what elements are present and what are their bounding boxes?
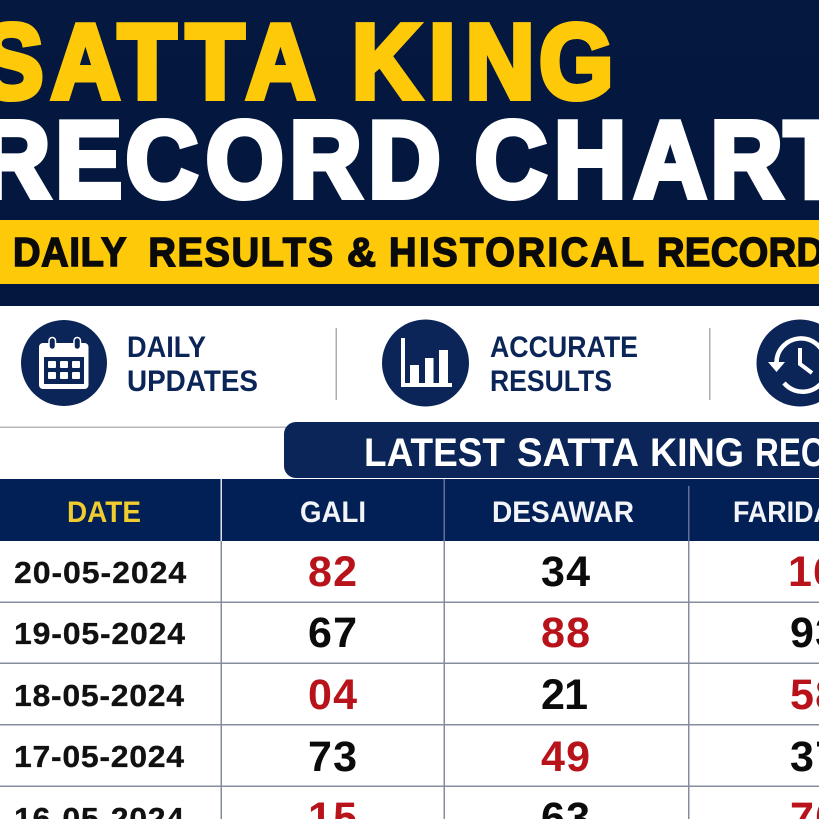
tab background <box>284 422 819 478</box>
section heading tab <box>284 422 819 478</box>
ribbon text: DAILY <box>13 230 126 275</box>
label: accurate results: RESULTS <box>490 365 612 398</box>
label: daily updates: DAILY <box>127 331 206 364</box>
tab text: LATEST <box>364 431 505 475</box>
label: accurate results: ACCURATE <box>490 331 638 364</box>
row: 17-05-2024: 17-05-2024 <box>14 740 185 774</box>
label: daily updates: UPDATES <box>127 365 258 398</box>
ribbon text: HISTORICAL <box>389 230 644 275</box>
header background <box>0 0 819 306</box>
ribbon text: RESULTS <box>148 230 333 275</box>
feature strip <box>21 320 819 406</box>
ribbon bar <box>0 220 819 284</box>
tab text: KING <box>650 431 744 475</box>
row: 19-05-2024 <box>14 609 819 657</box>
icon: clock history <box>756 320 819 406</box>
row: 20-05-2024: 34 <box>541 548 590 596</box>
ribbon text <box>13 230 819 275</box>
tab text: SATTA <box>517 431 639 475</box>
row: 18-05-2024: 04 <box>308 671 357 719</box>
tab text <box>364 431 819 475</box>
row: 19-05-2024: 19-05-2024 <box>14 617 186 651</box>
row: 17-05-2024: 73 <box>308 733 357 781</box>
row: 19-05-2024: 88 <box>541 609 590 657</box>
label: daily updates <box>127 331 258 398</box>
results table <box>0 479 819 819</box>
icon: calendar <box>21 320 107 406</box>
header banner <box>0 0 819 306</box>
label: accurate results <box>490 331 638 398</box>
row: 18-05-2024: 18-05-2024 <box>14 679 185 713</box>
row: 19-05-2024: 67 <box>308 609 357 657</box>
icon: bar chart <box>382 320 469 406</box>
table grid lines <box>0 541 819 819</box>
row: 18-05-2024: 21 <box>541 671 588 719</box>
row: 17-05-2024: 49 <box>541 733 590 781</box>
row: 18-05-2024 <box>14 671 819 719</box>
feature: history icon <box>756 320 819 406</box>
row: 20-05-2024: 82 <box>308 548 357 596</box>
row: 16-05-2024 <box>14 794 819 819</box>
row: 20-05-2024 <box>14 548 819 596</box>
feature: accurate results <box>382 320 638 406</box>
ribbon text: & <box>347 230 376 275</box>
table header row <box>0 479 819 541</box>
column: date: DATE <box>67 496 141 529</box>
feature: daily updates <box>21 320 258 406</box>
column: desawar: DESAWAR <box>492 496 634 529</box>
row: 20-05-2024: 20-05-2024 <box>14 556 187 590</box>
row: 17-05-2024 <box>14 733 819 781</box>
column: gali: GALI <box>300 496 366 529</box>
subtitle ribbon <box>0 220 819 284</box>
